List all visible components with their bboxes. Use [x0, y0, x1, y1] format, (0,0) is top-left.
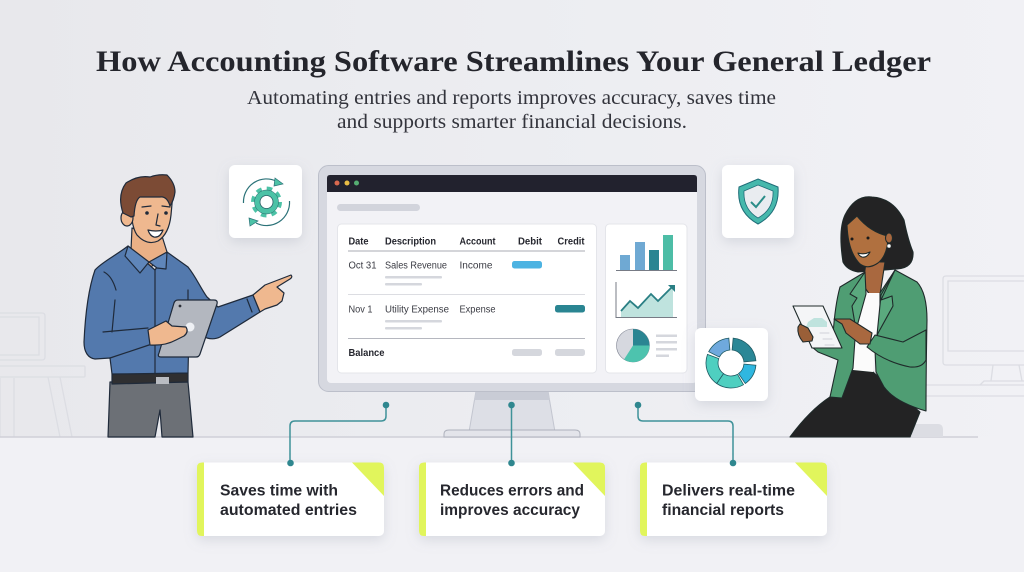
ledger table panel: [338, 224, 596, 373]
table header: [348, 236, 585, 248]
man shirt: [84, 246, 260, 374]
illustration: woman with tablet: [790, 197, 943, 437]
card: real-time reports: financial reports: [662, 502, 784, 519]
row: Oct 31: Income: [460, 260, 493, 272]
table header: Description: [385, 236, 436, 248]
man collar: [125, 246, 167, 273]
man smile: [148, 230, 163, 237]
subtitle: Automating entries and reports improves accuracy, saves time: [247, 87, 776, 109]
connector: reduces errors: [508, 402, 515, 463]
icon card: shield: [722, 165, 794, 238]
subtitle: [247, 87, 776, 133]
illustration: man with tablet: [84, 175, 292, 437]
faint background desk right: [925, 276, 1024, 396]
card: real-time reports: [640, 460, 827, 536]
card: reduces errors: [419, 460, 605, 536]
row: Oct 31: Oct 31: [348, 260, 377, 272]
woman white top: [853, 293, 880, 372]
faint background desk left: [0, 313, 85, 437]
woman hair: [841, 197, 913, 272]
icon: shield with check: [739, 179, 778, 224]
window title bar: [327, 175, 697, 192]
row: Nov 1: [348, 304, 585, 330]
charts panel: [606, 224, 687, 373]
row: Nov 1: Nov 1: [348, 304, 373, 316]
man holding hand: [148, 321, 187, 345]
card: saves time: Saves time with: [220, 482, 338, 500]
pie chart: [616, 329, 650, 362]
woman lapels: [850, 270, 895, 335]
seat: [912, 424, 943, 437]
line chart: [616, 282, 677, 318]
woman neck: [863, 262, 885, 295]
man hair: [121, 175, 175, 217]
man eyes: [145, 211, 168, 215]
man pointing hand: [253, 275, 292, 312]
man nose and brows: [142, 206, 170, 226]
table header: Debit: [518, 236, 543, 248]
monitor stand: [444, 391, 580, 437]
monitor screen: [327, 175, 697, 383]
card: saves time: [197, 460, 384, 536]
bar chart: [616, 235, 677, 270]
man trousers: [108, 382, 193, 437]
card: saves time: automated entries: [220, 502, 357, 519]
subtitle: and supports smarter financial decisions.: [337, 111, 687, 133]
connector: saves time: [290, 402, 389, 463]
icon: donut chart: [706, 338, 756, 388]
man neck: [131, 228, 167, 268]
woman face: [847, 216, 888, 267]
icon card: gear: [229, 165, 302, 238]
main monitor: [318, 166, 706, 437]
connector: real-time reports: [635, 402, 733, 463]
row: Nov 1: Utility Expense: [385, 304, 449, 316]
table header: Date: [348, 236, 369, 248]
row: Balance: [348, 348, 585, 359]
woman pointing hand: [834, 319, 872, 344]
row: Oct 31: [348, 260, 542, 286]
man tablet: [158, 300, 217, 357]
woman ear and earring: [886, 233, 892, 248]
card: reduces errors: Reduces errors and: [440, 482, 584, 500]
icon card: donut: [695, 328, 768, 401]
table header: Credit: [558, 236, 585, 248]
monitor frame: [318, 166, 706, 392]
card: real-time reports: Delivers real-time: [662, 482, 795, 500]
woman smile: [858, 252, 870, 257]
row: Nov 1: Expense: [460, 304, 496, 316]
row: Oct 31: Sales Revenue: [385, 260, 447, 272]
title: How Accounting Software Streamlines Your General Ledger: [96, 45, 931, 78]
table header: Account: [460, 236, 496, 248]
woman tablet: [793, 306, 842, 348]
man ear: [121, 210, 133, 226]
row: Balance: Balance: [348, 348, 385, 359]
floor line: [0, 436, 978, 438]
woman sleeve: [867, 330, 926, 367]
woman jacket: [812, 270, 927, 411]
woman left hand: [798, 324, 813, 342]
woman trousers: [790, 370, 920, 437]
icon: gear with cycle arrows: [243, 178, 290, 226]
pie legend: [656, 334, 677, 357]
woman eyes: [850, 236, 870, 240]
man head: [131, 187, 173, 243]
card: reduces errors: improves accuracy: [440, 502, 580, 519]
man belt: [112, 373, 188, 384]
